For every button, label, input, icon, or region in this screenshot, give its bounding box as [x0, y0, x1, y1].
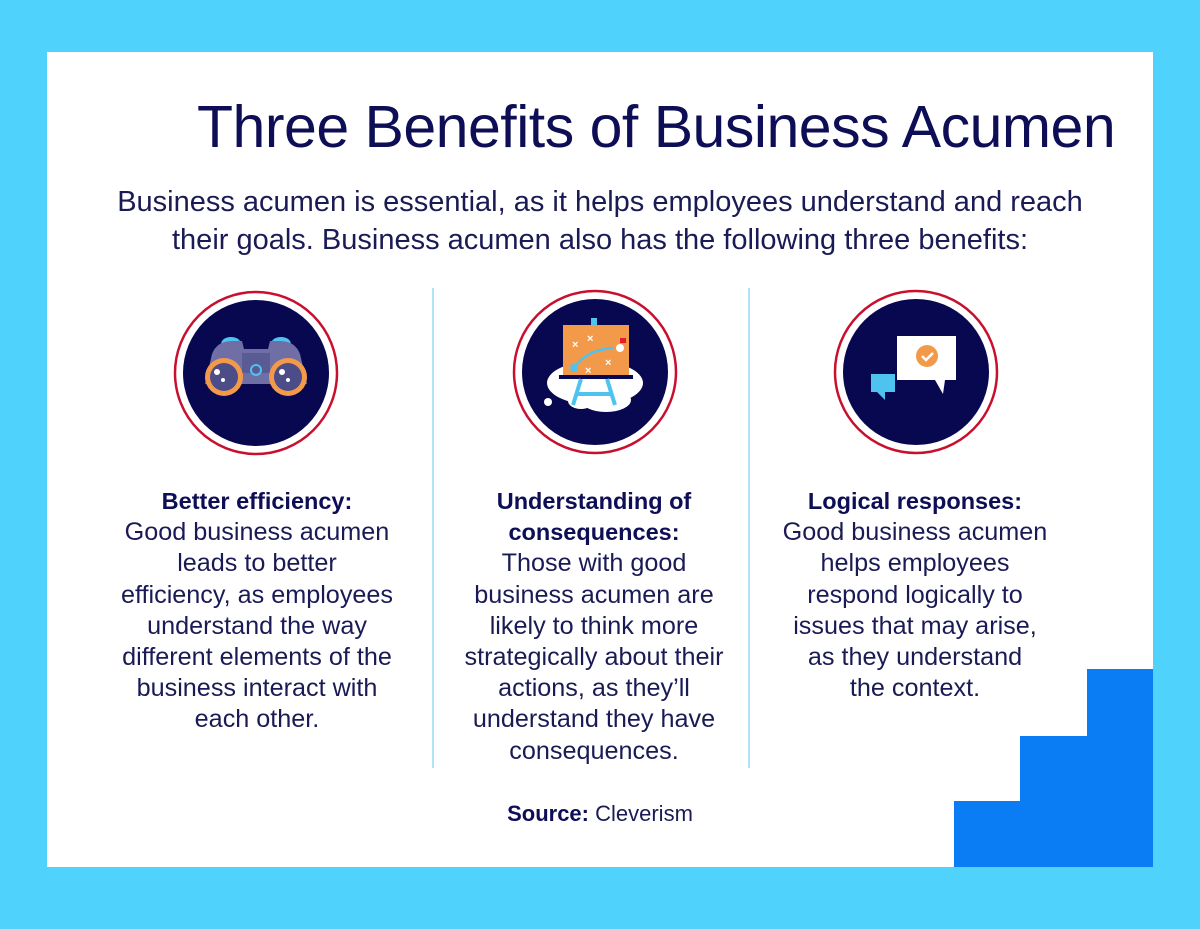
column: understanding of consequences: understand they have [473, 705, 715, 733]
column: better efficiency: efficiency, as employees [121, 581, 393, 609]
column: understanding of consequences: Understanding of [497, 488, 691, 514]
column: understanding of consequences: actions, as they’ll [498, 674, 690, 702]
column: logical responses: the context. [850, 674, 980, 702]
column: understanding of consequences: strategically about their [464, 643, 724, 671]
column: better efficiency: business interact with [137, 674, 377, 702]
column: logical responses: Logical responses: [808, 488, 1022, 514]
icon: strategy board: × [605, 357, 611, 369]
subtitle: their goals. Business acumen also has the following three benefits: [172, 224, 1028, 256]
column: logical responses [783, 488, 1047, 702]
column: logical responses: Good business acumen [783, 518, 1047, 546]
column: better efficiency [121, 488, 393, 733]
title: Three Benefits of Business Acumen [197, 94, 1115, 160]
staircase decoration [954, 669, 1153, 867]
icon: speech bubbles [834, 290, 998, 454]
column: understanding of consequences: business acumen are [474, 581, 714, 609]
column: better efficiency: each other. [195, 705, 319, 733]
icon: strategy board: × [572, 339, 578, 351]
column: understanding of consequences: consequences. [509, 737, 679, 765]
subtitle: Business acumen is essential, as it helps employees understand and reach [117, 186, 1083, 218]
subtitle [117, 186, 1083, 256]
column: better efficiency: Good business acumen [125, 518, 389, 546]
column: logical responses: issues that may arise, [793, 612, 1037, 640]
column: understanding of consequences: consequences: [508, 519, 680, 545]
source: Source: Cleverism [507, 801, 693, 826]
icon: strategy board [512, 290, 678, 454]
column: understanding of consequences: likely to think more [490, 612, 698, 640]
column: logical responses: respond logically to [807, 581, 1023, 609]
icon: binoculars [174, 290, 338, 456]
column: better efficiency: Better efficiency: [162, 488, 352, 514]
column: better efficiency: understand the way [147, 612, 367, 640]
icon: strategy board: × [587, 333, 593, 345]
column: better efficiency: different elements of the [122, 643, 392, 671]
column: logical responses: helps employees [820, 549, 1010, 577]
column: better efficiency: leads to better [177, 549, 337, 577]
column: understanding of consequences [464, 488, 724, 765]
column: logical responses: as they understand [808, 643, 1022, 671]
column: understanding of consequences: Those with good [502, 549, 686, 577]
icon: strategy board: × [585, 365, 591, 377]
